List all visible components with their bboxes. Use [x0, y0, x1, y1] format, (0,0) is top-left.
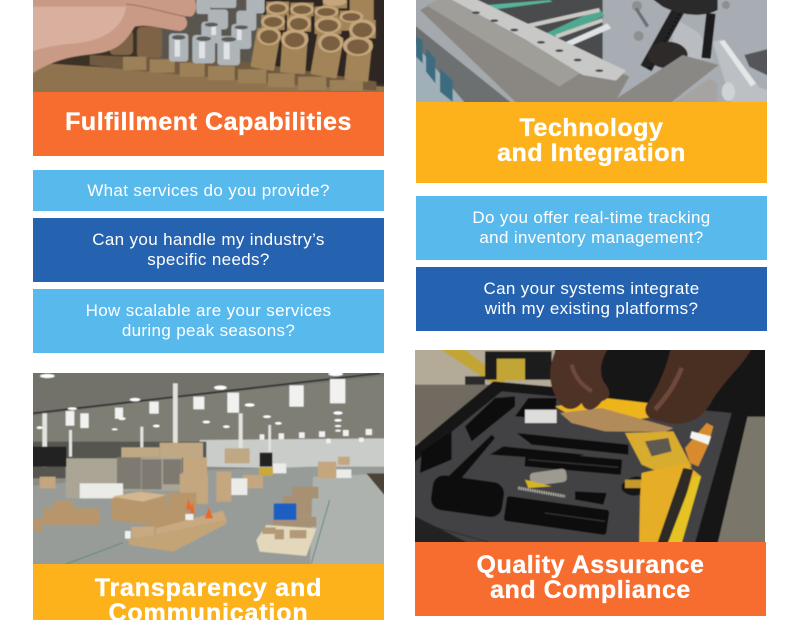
question: services [33, 170, 384, 211]
question: industry needs [33, 218, 384, 282]
photo: hand picking metal parts from a box [33, 0, 384, 92]
photo: hands packing tools in a foam case [415, 350, 765, 542]
question: real-time tracking: Do you offer real-time tracking [472, 208, 711, 227]
question: industry needs: Can you handle my industry’s [92, 230, 325, 249]
banner: Technology and Integration: and Integration [497, 139, 686, 167]
question: scalability: How scalable are your services [86, 301, 331, 320]
banner: Fulfillment Capabilities [33, 92, 384, 156]
banner: Technology and Integration: Technology [520, 114, 663, 142]
banner: Quality Assurance and Compliance: Quality Assurance [477, 551, 704, 579]
question: scalability: during peak seasons? [122, 321, 295, 340]
banner: Fulfillment Capabilities: Fulfillment Capabilities [65, 108, 352, 136]
banner: Transparency and Communication [33, 564, 384, 620]
question: real-time tracking: and inventory management? [479, 228, 704, 247]
question: industry needs: specific needs? [147, 250, 270, 269]
banner: Transparency and Communication: Transparency and [95, 574, 322, 602]
banner: Quality Assurance and Compliance [415, 542, 766, 616]
banner: Technology and Integration [416, 102, 767, 183]
question: scalability [33, 289, 384, 353]
question: system integration: with my existing platforms? [485, 299, 698, 318]
question: system integration: Can your systems integrate [483, 279, 700, 298]
banner: Quality Assurance and Compliance: and Compliance [490, 576, 691, 604]
question: system integration [416, 267, 767, 331]
photo: warehouse floor [33, 373, 384, 564]
question: services: What services do you provide? [87, 180, 330, 200]
photo: conveyor machinery [416, 0, 767, 102]
question: real-time tracking [416, 196, 767, 260]
